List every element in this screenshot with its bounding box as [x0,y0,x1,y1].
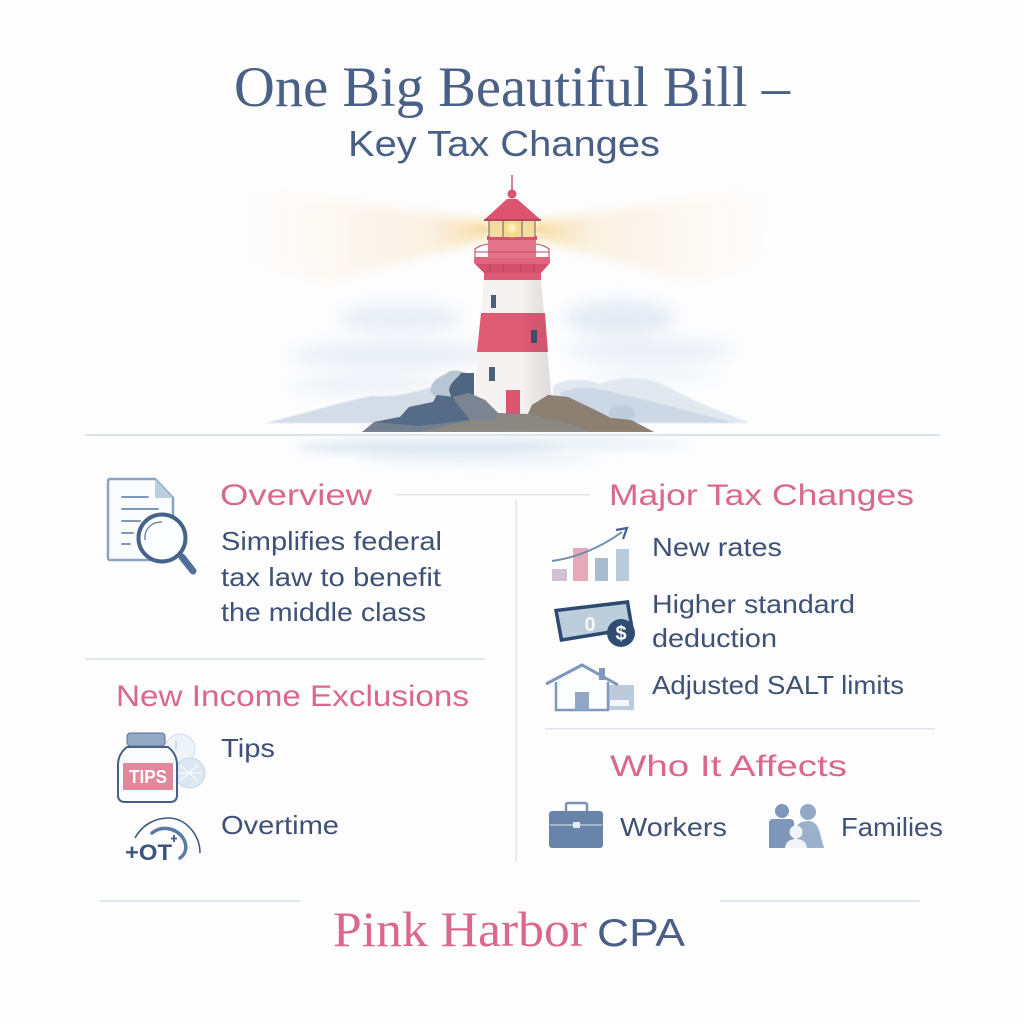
panel: overview [108,479,442,627]
panel: major tax changes [546,479,914,710]
water line [85,434,940,436]
label: new rates: New rates [652,532,782,562]
panel: who it affects [549,750,943,848]
text: overview body: the middle class [221,597,426,627]
tree [431,370,474,402]
light beams [240,188,775,282]
icon: house [546,665,634,710]
text: overview body: tax law to benefit [221,562,442,592]
footer: brand: Pink Harbor [333,901,587,957]
roof [484,199,541,220]
title: Key Tax Changes [348,123,660,164]
clouds [290,301,735,395]
railing [475,244,549,258]
panel: new income exclusions [116,680,469,865]
label: workers: Workers [620,812,727,842]
icon: overtime gauge: +OT [125,840,173,865]
footer: brand [333,901,685,957]
icon: banknote with dollar coin [554,600,635,647]
label: tips: Tips [221,733,275,763]
illustration: lighthouse on island [85,175,940,465]
finial [508,175,516,198]
label: higher standard deduction [652,589,855,653]
title: One Big Beautiful Bill – [234,56,790,119]
footer: brand: CPA [597,912,685,955]
icon: family [769,804,824,848]
label: overtime: Overtime [221,810,339,840]
label: higher standard deduction: Higher standard [652,589,855,619]
icon: banknote with dollar coin: $ [615,623,627,645]
icon: tips jar: TIPS [129,767,167,787]
text: overview body [221,526,442,627]
gallery corbels [474,263,550,273]
icon: bar chart with arrow [552,528,629,581]
icon: tips jar [118,733,205,802]
icon: overtime gauge [125,818,200,865]
label: families: Families [841,812,943,842]
icon: document with magnifier [108,479,193,571]
text: overview body: Simplifies federal [221,526,442,556]
icon: banknote with dollar coin: 0 [584,614,596,636]
title [234,56,790,164]
heading: major tax changes: Major Tax Changes [609,479,914,512]
tower body [473,280,553,415]
door [506,390,520,415]
label: adjusted salt limits: Adjusted SALT limits [652,670,904,700]
label: higher standard deduction: deduction [652,623,777,653]
watch room [488,238,536,258]
heading: new income exclusions: New Income Exclusions [116,680,469,713]
distant hills [265,378,750,423]
water [295,439,690,465]
rocks [362,393,654,432]
heading: overview: Overview [220,479,372,512]
windows [491,295,496,308]
heading: who it affects: Who It Affects [610,750,847,783]
lantern [489,219,535,237]
icon: briefcase [549,803,603,848]
